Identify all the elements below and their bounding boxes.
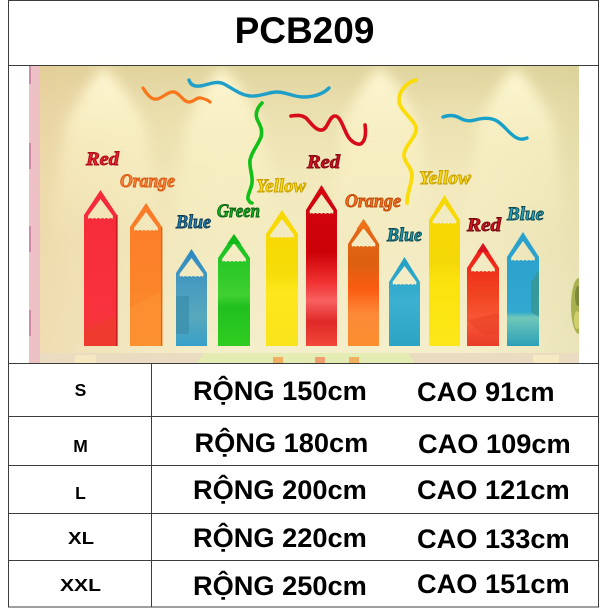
color words in script: Red xyxy=(306,152,341,173)
color words in script: Orange xyxy=(345,191,402,212)
color words in script: Blue xyxy=(386,225,423,246)
row S: S xyxy=(75,380,86,400)
row S: CAO 91cm xyxy=(417,376,555,407)
squiggle: orange xyxy=(143,88,210,102)
pencil: dark red xyxy=(306,185,337,346)
row XL xyxy=(68,521,570,554)
pencil: green xyxy=(218,234,250,346)
row M: RỘNG 180cm xyxy=(194,426,368,458)
color words in script: Blue xyxy=(175,212,212,233)
row XXL: RỘNG 250cm xyxy=(193,569,367,601)
row L: L xyxy=(75,483,86,503)
squiggle: dark red xyxy=(291,115,366,144)
size table xyxy=(60,374,571,601)
color words in script xyxy=(85,149,545,246)
row L: RỘNG 200cm xyxy=(193,473,367,505)
row XL: CAO 133cm xyxy=(417,523,570,554)
color words in script: Yellow xyxy=(256,176,306,197)
pencil: blue three xyxy=(507,232,539,346)
row XL: RỘNG 220cm xyxy=(193,521,367,553)
pencil: orange xyxy=(130,203,162,346)
color words in script: Green xyxy=(217,201,260,222)
squiggle: yellow xyxy=(399,80,416,203)
color words in script: Red xyxy=(466,215,502,236)
pencil: yellow two xyxy=(429,195,460,346)
color words in script: Red xyxy=(85,149,120,170)
plant xyxy=(571,270,598,340)
pencil: red xyxy=(84,190,118,346)
row XXL: XXL xyxy=(60,575,101,595)
squiggle: light blue xyxy=(443,116,527,139)
row L xyxy=(75,473,570,505)
color words in script: Yellow xyxy=(419,168,471,189)
pencil: yellow xyxy=(266,210,298,346)
color words in script: Orange xyxy=(120,171,176,192)
pencil: blue two xyxy=(389,257,420,346)
wall photo with acrylic pencils xyxy=(29,66,598,363)
row S: RỘNG 150cm xyxy=(193,374,367,406)
spotlights on wall xyxy=(50,68,566,240)
pencil: orange two xyxy=(348,219,379,346)
row S xyxy=(75,374,555,407)
pencil: blue xyxy=(176,249,207,346)
row XXL xyxy=(60,568,570,601)
squiggle: green xyxy=(248,103,262,203)
row M xyxy=(73,426,571,459)
row XL: XL xyxy=(68,528,94,548)
title: product code: PCB209 xyxy=(235,10,374,51)
floor strip xyxy=(40,353,579,363)
squiggle: long blue xyxy=(189,80,329,97)
pink door frame xyxy=(29,66,40,363)
row M: M xyxy=(73,436,88,456)
pencil: red three xyxy=(467,243,499,346)
row L: CAO 121cm xyxy=(417,474,570,505)
row XXL: CAO 151cm xyxy=(417,568,570,599)
wall background xyxy=(29,66,579,363)
row M: CAO 109cm xyxy=(418,428,571,459)
color words in script: Blue xyxy=(506,204,545,225)
